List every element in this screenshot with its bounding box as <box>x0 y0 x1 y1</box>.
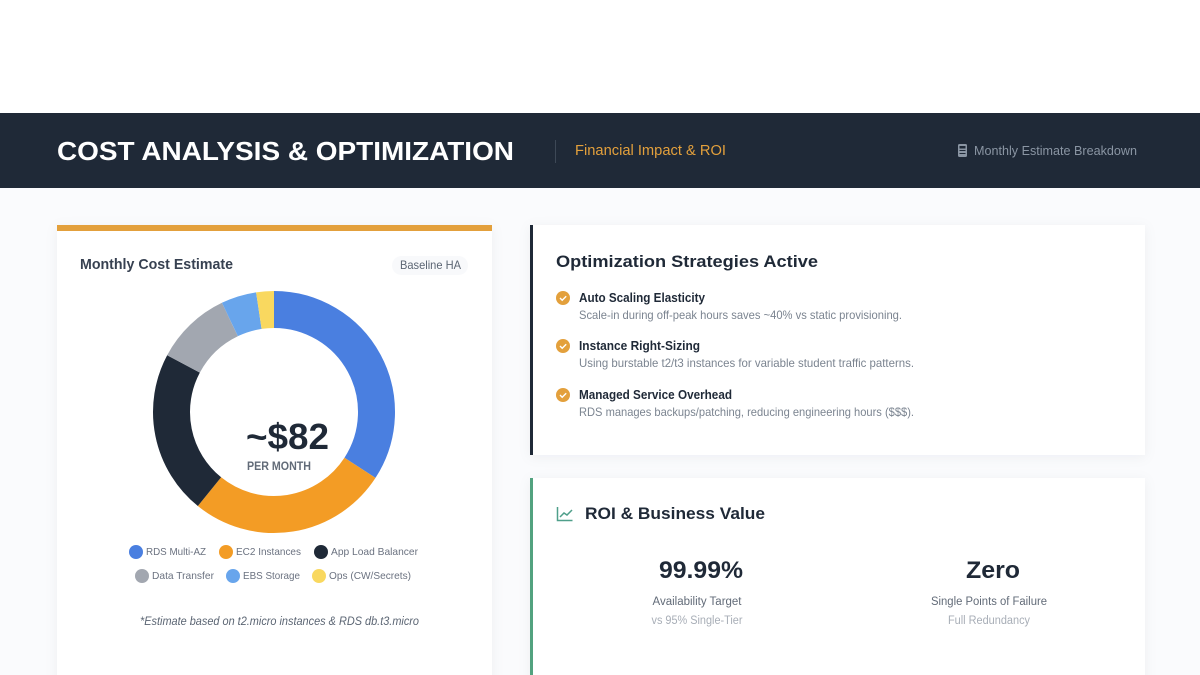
icon: line chart <box>558 507 572 520</box>
panel: optimization strategies <box>530 225 1145 455</box>
legend: EBS Storage <box>243 570 300 582</box>
legend: App Load Balancer <box>331 546 418 558</box>
total caption: PER MONTH <box>247 459 311 473</box>
metric: failure points: Full Redundancy <box>948 615 1030 627</box>
strategy: right-sizing: Using burstable t2/t3 instances for variable student traffic patterns. <box>579 356 914 370</box>
header note: Monthly Estimate Breakdown <box>974 143 1137 158</box>
legend: Data Transfer <box>152 570 214 582</box>
header band <box>0 113 1200 188</box>
subtitle: Financial Impact & ROI <box>575 143 726 159</box>
panel: ROI and business value <box>530 478 1145 675</box>
legend: RDS Multi-AZ <box>146 546 207 558</box>
icon: calculator <box>958 144 967 157</box>
donut chart <box>171 310 377 515</box>
strategy: auto scaling <box>556 291 902 322</box>
legend: Ops (CW/Secrets) <box>329 570 411 582</box>
metric: availability: Availability Target <box>652 596 742 608</box>
badge: Baseline HA <box>400 258 461 272</box>
metric: failure points <box>931 557 1047 627</box>
strategy: managed service: Managed Service Overhead <box>579 388 732 402</box>
strategy: managed service: RDS manages backups/patching, reducing engineering hours ($$$). <box>579 405 914 419</box>
metric: availability: 99.99% <box>659 557 743 584</box>
metric: failure points: Single Points of Failure <box>931 596 1047 608</box>
footnote: *Estimate based on t2.micro instances & RDS db.t3.micro <box>140 616 420 628</box>
panel heading: Optimization Strategies Active <box>556 253 818 271</box>
panel: monthly cost estimate <box>57 225 492 675</box>
strategy: auto scaling: Scale-in during off-peak hours saves ~40% vs static provisioning. <box>579 308 902 322</box>
badge <box>392 256 468 275</box>
strategy: right-sizing <box>556 339 914 370</box>
metric: failure points: Zero <box>966 557 1020 584</box>
metric: availability <box>652 557 743 627</box>
panel heading: Monthly Cost Estimate <box>80 256 233 273</box>
strategy: managed service <box>556 388 914 419</box>
legend <box>129 545 418 583</box>
legend: EC2 Instances <box>236 546 301 558</box>
panel heading: ROI & Business Value <box>585 505 765 523</box>
metric: availability: vs 95% Single-Tier <box>652 615 743 627</box>
total value: ~$82 <box>246 416 329 457</box>
strategy: auto scaling: Auto Scaling Elasticity <box>579 291 705 305</box>
title: COST ANALYSIS & OPTIMIZATION <box>57 138 514 166</box>
strategy: right-sizing: Instance Right-Sizing <box>579 339 700 353</box>
